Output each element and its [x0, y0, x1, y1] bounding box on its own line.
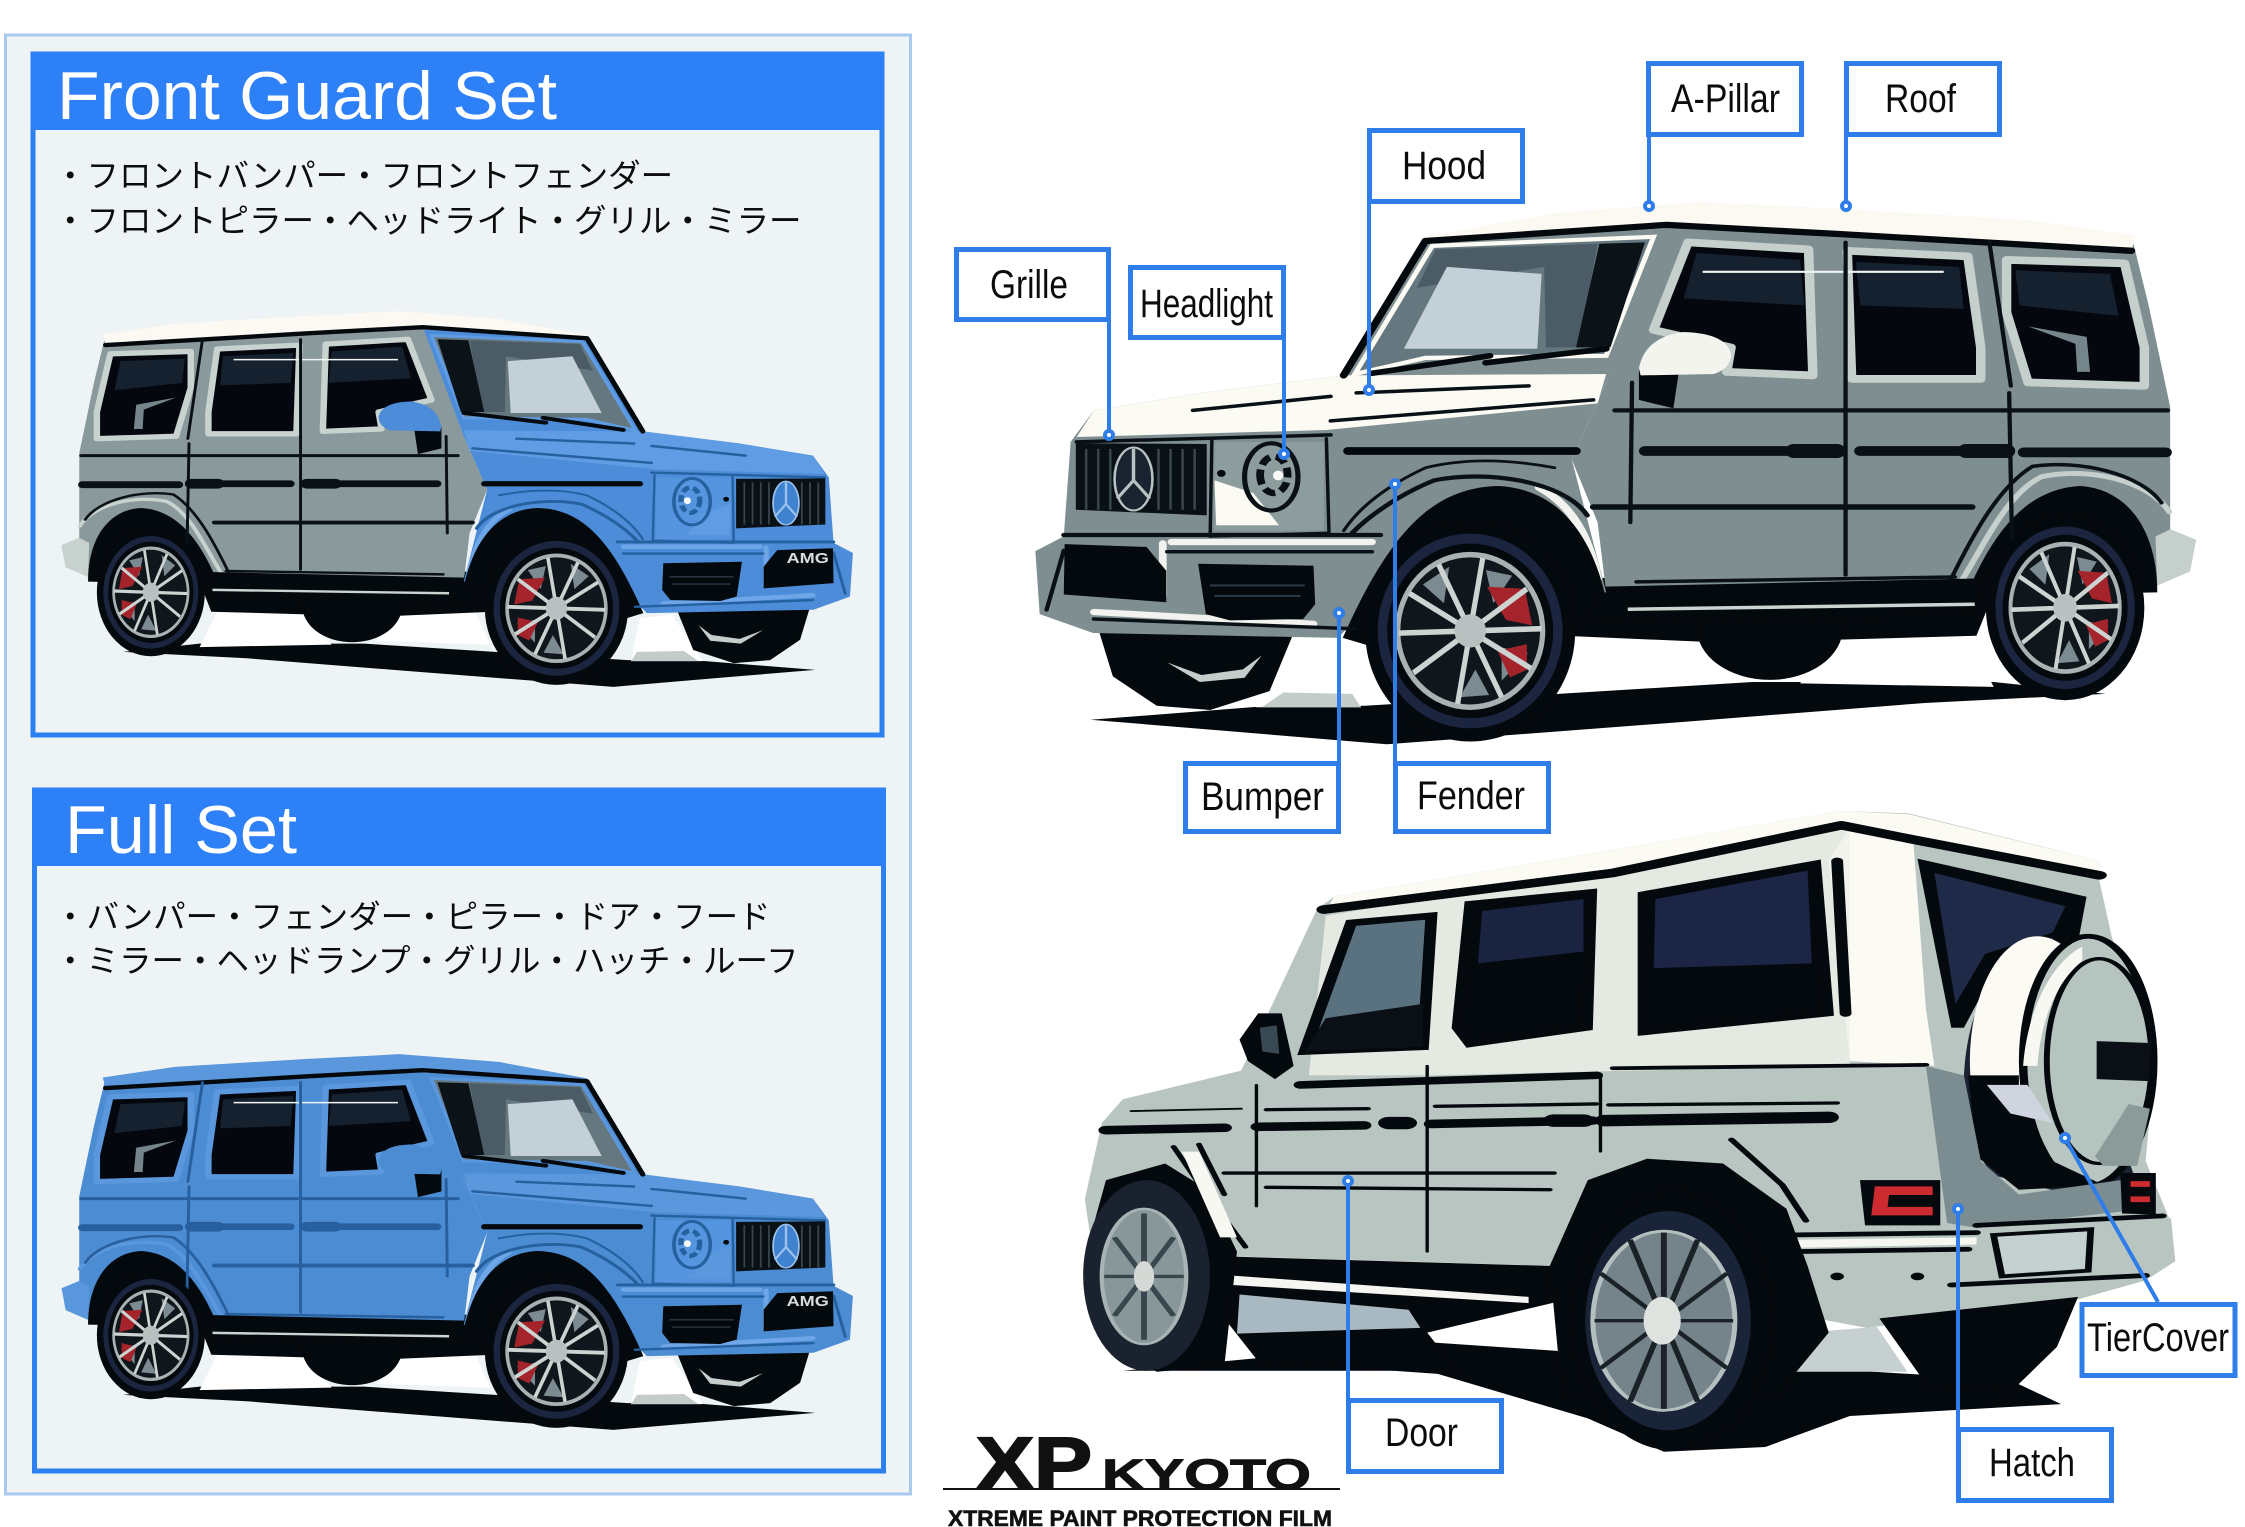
parts list: ・バンパー・フェンダー・ピラー・ドア・フード [54, 899, 771, 935]
rear glass [1917, 859, 2087, 1028]
parts list: ・フロントピラー・ヘッドライト・グリル・ミラー [54, 203, 802, 239]
tail lights [1860, 1180, 1940, 1225]
logo: XP Kyoto: KYOTO [1102, 1451, 1311, 1499]
parts list [54, 899, 799, 979]
rear quarter dark panel [1926, 1066, 2146, 1228]
rear arch [1550, 1159, 1829, 1399]
callout: A-Pillar: A-Pillar [1671, 77, 1780, 121]
panel: Front Guard Set [30, 52, 884, 735]
side lines [1300, 1075, 1596, 1085]
callout: Headlight [1130, 268, 1288, 458]
mirror [1240, 1013, 1294, 1079]
logo: XP Kyoto: XP [976, 1422, 1092, 1505]
parts list [54, 158, 802, 239]
callout: Roof [1842, 64, 2000, 210]
callout: Headlight: Headlight [1140, 282, 1273, 326]
car: front three-quarter view [1035, 202, 2196, 744]
heading: Front Guard Set [57, 58, 557, 134]
car: front parts highlighted [62, 311, 853, 687]
callout: Hood [1365, 130, 1522, 394]
side step [1224, 1256, 1558, 1376]
wheels [1083, 1180, 1210, 1371]
callout: Bumper [1186, 609, 1343, 832]
tire cover [1964, 937, 2137, 1194]
callout: Roof: Roof [1885, 77, 1957, 121]
callout: Hood: Hood [1402, 144, 1486, 188]
panel: Full Set [32, 788, 886, 1471]
rear bumper [1782, 1218, 2175, 1328]
callout: Hatch [1954, 1205, 2112, 1500]
far rear wheel [1879, 1297, 2078, 1392]
body silhouette [1085, 811, 2175, 1323]
windows [1305, 916, 1431, 1052]
callout: TierCover [2061, 1134, 2235, 1376]
callout: Fender: Fender [1417, 774, 1525, 818]
callout: Grille: Grille [990, 263, 1068, 307]
logo: XP Kyoto [943, 1422, 1340, 1527]
roof [1326, 811, 2099, 911]
callout: Hatch: Hatch [1989, 1441, 2075, 1485]
callout: Grille [956, 250, 1113, 439]
shadow [1123, 1342, 2061, 1452]
heading: Full Set [65, 792, 297, 868]
heading bar [32, 788, 886, 866]
car: full body highlighted [62, 1054, 853, 1430]
parts list: ・フロントバンパー・フロントフェンダー [54, 158, 673, 194]
callout: Door [1344, 1177, 1502, 1472]
front arch [1085, 1164, 1237, 1372]
parts list: ・ミラー・ヘッドランプ・グリル・ハッチ・ルーフ [54, 943, 799, 979]
callout: Door: Door [1385, 1411, 1458, 1455]
panel: outer packages panel [6, 35, 910, 1494]
car: rear three-quarter view [1083, 811, 2175, 1452]
callout: Fender [1391, 480, 1548, 832]
callout: Bumper: Bumper [1201, 775, 1324, 819]
callout: A-Pillar [1645, 64, 1802, 210]
heading bar [30, 52, 884, 130]
